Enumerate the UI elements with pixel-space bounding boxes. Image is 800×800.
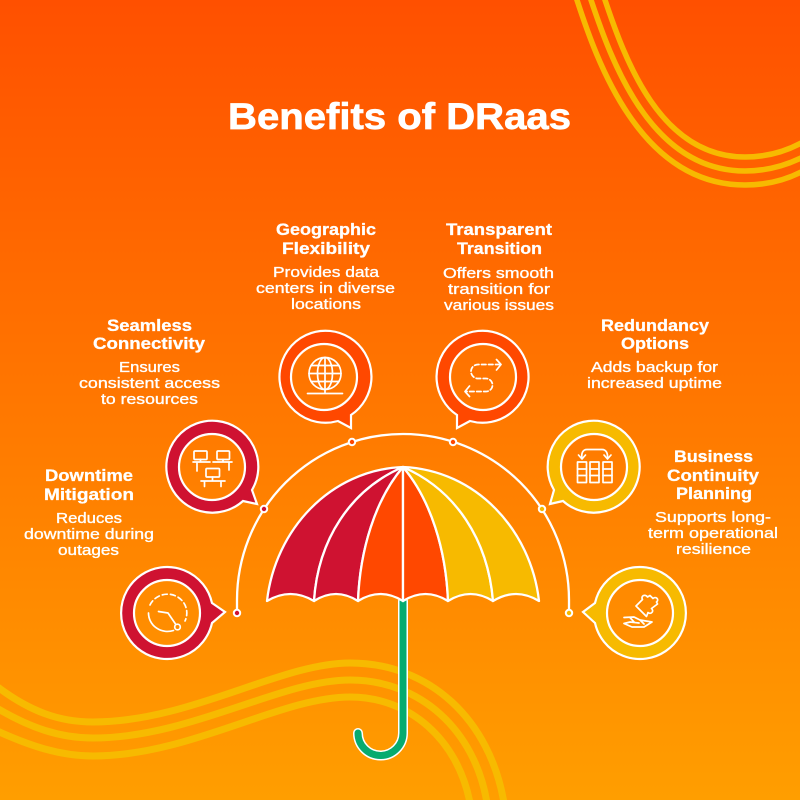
text: downtime mitigation: outages: [58, 542, 119, 559]
icon: hand holding puzzle piece: [624, 595, 658, 627]
title: Benefits of DRaas: [228, 96, 571, 137]
text: transparent transition: Transparent: [446, 220, 552, 239]
text: seamless connectivity: [79, 316, 220, 408]
dot: continuity: [566, 610, 572, 616]
text: redundancy options: [587, 316, 722, 392]
bubble: seamless connectivity: [166, 421, 258, 513]
umbrella handle: [358, 601, 403, 756]
text: business continuity planning: Planning: [676, 484, 752, 503]
dot: transparent: [450, 439, 456, 445]
connector arc with dots: [234, 434, 572, 616]
text: redundancy options: increased uptime: [587, 375, 722, 392]
bubble: transparent transition: [437, 331, 529, 428]
text: downtime mitigation: downtime during: [24, 526, 154, 543]
bubble: business continuity planning: [583, 567, 686, 659]
text: transparent transition: transition for: [448, 281, 550, 298]
bubble: redundancy options: [548, 421, 640, 513]
text: geographic flexibility: [256, 220, 395, 313]
text: redundancy options: Options: [621, 334, 689, 353]
text: seamless connectivity: Connectivity: [93, 334, 206, 353]
icon: storage columns with arrows: [578, 450, 612, 482]
icon: dashed S arrow: [465, 360, 501, 396]
text: downtime mitigation: [24, 466, 154, 559]
text: seamless connectivity: to resources: [101, 391, 198, 408]
decorative wave: top right: [576, 0, 800, 185]
dot: downtime: [234, 610, 240, 616]
text: transparent transition: Offers smooth: [443, 265, 554, 282]
umbrella: [267, 467, 539, 756]
text: business continuity planning: term operational: [648, 525, 778, 542]
decorative wave: bottom: [0, 663, 504, 800]
text: seamless connectivity: Seamless: [107, 316, 192, 335]
icon: clock: [148, 594, 187, 631]
text: business continuity planning: [648, 447, 778, 558]
dot: redundancy: [539, 506, 545, 512]
text: geographic flexibility: Geographic: [276, 220, 376, 239]
text: downtime mitigation: Downtime: [45, 466, 133, 485]
bubble: geographic flexibility: [279, 331, 371, 428]
text: business continuity planning: Business: [674, 447, 753, 466]
umbrella canopy: [267, 467, 539, 601]
text: redundancy options: Adds backup for: [591, 359, 718, 376]
text: transparent transition: Transition: [457, 239, 542, 258]
text: business continuity planning: Supports long-: [655, 509, 771, 526]
text: transparent transition: [443, 220, 554, 314]
text: seamless connectivity: consistent access: [79, 375, 220, 392]
text: downtime mitigation: Mitigation: [44, 485, 134, 504]
text: redundancy options: Redundancy: [601, 316, 710, 335]
icon: globe on stand: [308, 358, 342, 394]
bubble: downtime mitigation: [121, 567, 225, 659]
text: seamless connectivity: Ensures: [119, 359, 180, 376]
text: downtime mitigation: Reduces: [56, 510, 122, 527]
icon: networked workstations: [193, 451, 232, 486]
text: geographic flexibility: centers in diverse: [256, 280, 395, 297]
text: business continuity planning: Continuity: [667, 466, 760, 485]
text: transparent transition: various issues: [444, 297, 554, 314]
dot: connectivity: [261, 506, 267, 512]
text: geographic flexibility: locations: [291, 296, 361, 313]
text: geographic flexibility: Provides data: [273, 264, 380, 281]
text: geographic flexibility: Flexibility: [282, 239, 371, 258]
dot: geographic: [349, 439, 355, 445]
text: business continuity planning: resilience: [676, 541, 751, 558]
